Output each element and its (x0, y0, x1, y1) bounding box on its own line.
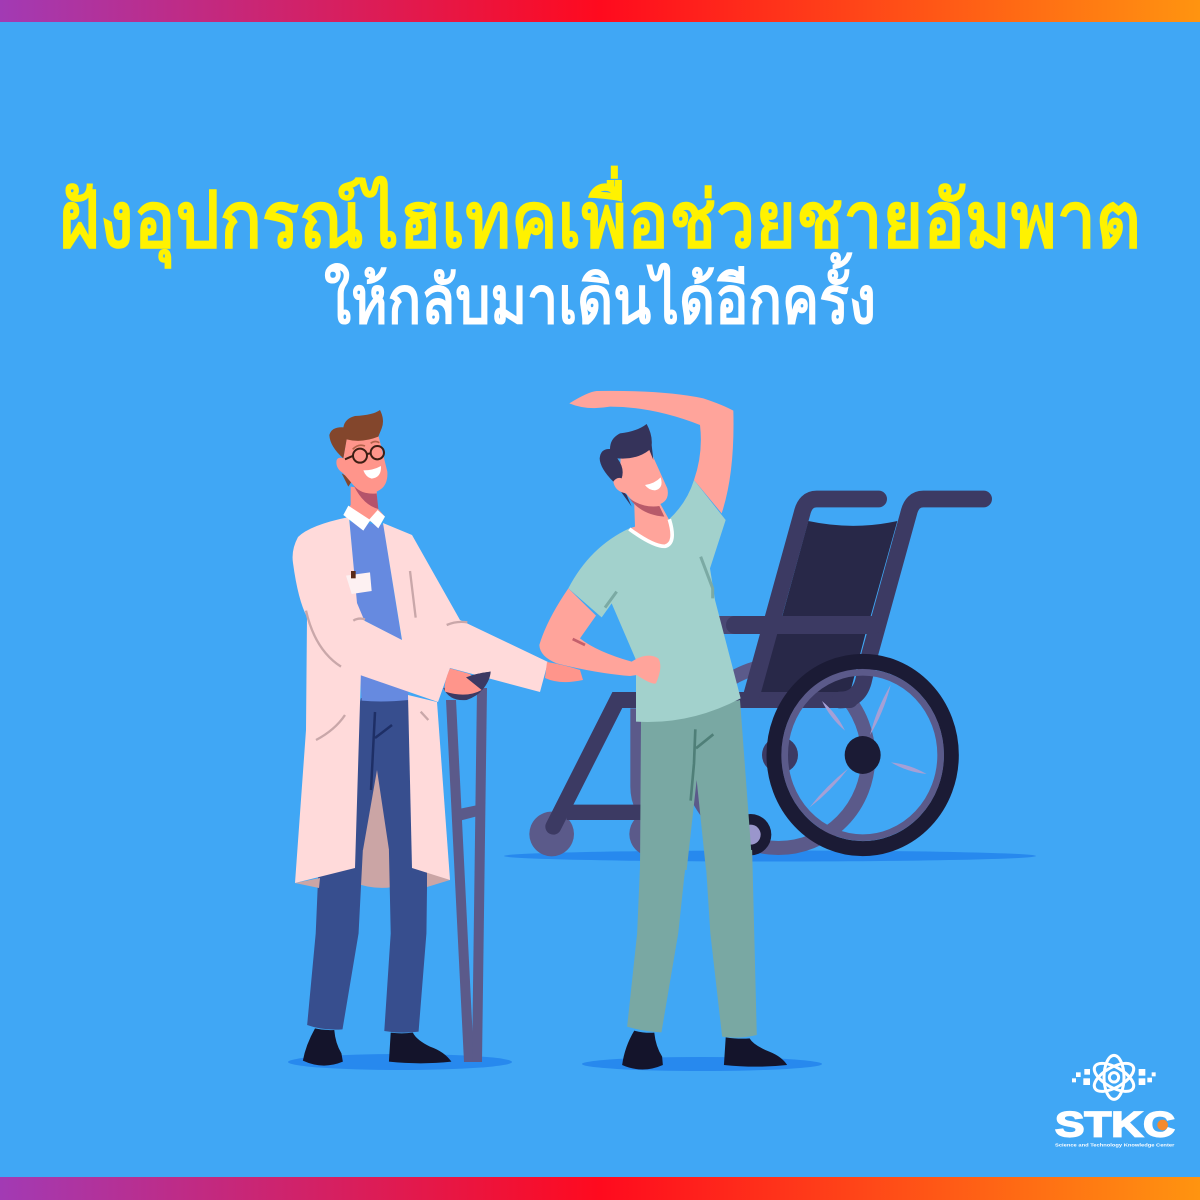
smile (363, 466, 381, 479)
crutch (446, 688, 487, 1062)
eyebrows (353, 441, 379, 449)
title (59, 165, 1141, 337)
id badge (346, 572, 372, 594)
upper doctor details (306, 410, 491, 740)
head (613, 448, 668, 506)
grip top (466, 672, 491, 690)
coat lower right panel (408, 695, 450, 880)
coat folds (306, 571, 467, 740)
hair (329, 410, 383, 458)
big wheel (774, 661, 951, 849)
shirt collar (343, 506, 385, 531)
hand on patient arm (545, 662, 583, 682)
patient upper legs (640, 700, 753, 870)
patient shoes (622, 1031, 787, 1069)
hand on crutch (445, 668, 482, 695)
sweater (350, 522, 408, 702)
doctor upper trousers (319, 698, 427, 850)
neck (343, 487, 385, 522)
seat back and lower panel (758, 521, 897, 693)
small castor wheels (529, 812, 771, 856)
doctor lower legs (307, 850, 427, 1033)
doctor (293, 410, 583, 1066)
t-shirt (568, 480, 741, 722)
coat bottom shade (295, 872, 450, 888)
data pixels (1072, 1069, 1156, 1085)
atom icon (1090, 1055, 1138, 1099)
patient upper body (539, 391, 741, 801)
trouser seam (691, 729, 713, 801)
ground shadows (288, 850, 1036, 1071)
armrest rear stub (718, 616, 742, 634)
neck (629, 497, 676, 548)
patient lower legs (627, 850, 757, 1038)
hair back (615, 483, 632, 507)
shirt collar (629, 519, 672, 546)
hub behind (762, 737, 798, 773)
wheelchair (529, 499, 984, 856)
wheel spokes (809, 685, 927, 808)
top gradient bar (0, 0, 1200, 22)
rear ring of wheelchair (637, 665, 868, 848)
STKC wordmark: STKC (1055, 1106, 1175, 1145)
patient (539, 391, 787, 1069)
title line 2: ให้กลับมาเดินได้อีกครั้ง (324, 251, 876, 337)
smile (645, 477, 662, 490)
coat left panel (293, 517, 365, 883)
badge clip (351, 571, 356, 578)
orange dot (1157, 1120, 1168, 1130)
lowered arm and hand (539, 588, 660, 684)
neck shadow (354, 486, 378, 509)
doctor shoes (303, 1028, 451, 1066)
elbow crease (573, 639, 585, 645)
coat (293, 517, 548, 883)
wheelchair frame (553, 499, 984, 827)
coat right panel and sleeve (340, 523, 548, 702)
raised arm (569, 391, 734, 513)
crutch grip (443, 672, 491, 700)
logo tagline: Science and Technology Knowledge Center (1055, 1143, 1174, 1149)
STKC logo (1055, 1055, 1175, 1149)
glasses (345, 446, 384, 463)
shirt folds (605, 557, 713, 608)
head (336, 435, 387, 493)
coat inner shade (352, 765, 402, 888)
neck shadow (629, 498, 664, 517)
hair back (342, 473, 353, 487)
hair (600, 424, 653, 482)
bottom gradient bar (0, 1177, 1200, 1200)
trousers seam (371, 712, 392, 790)
